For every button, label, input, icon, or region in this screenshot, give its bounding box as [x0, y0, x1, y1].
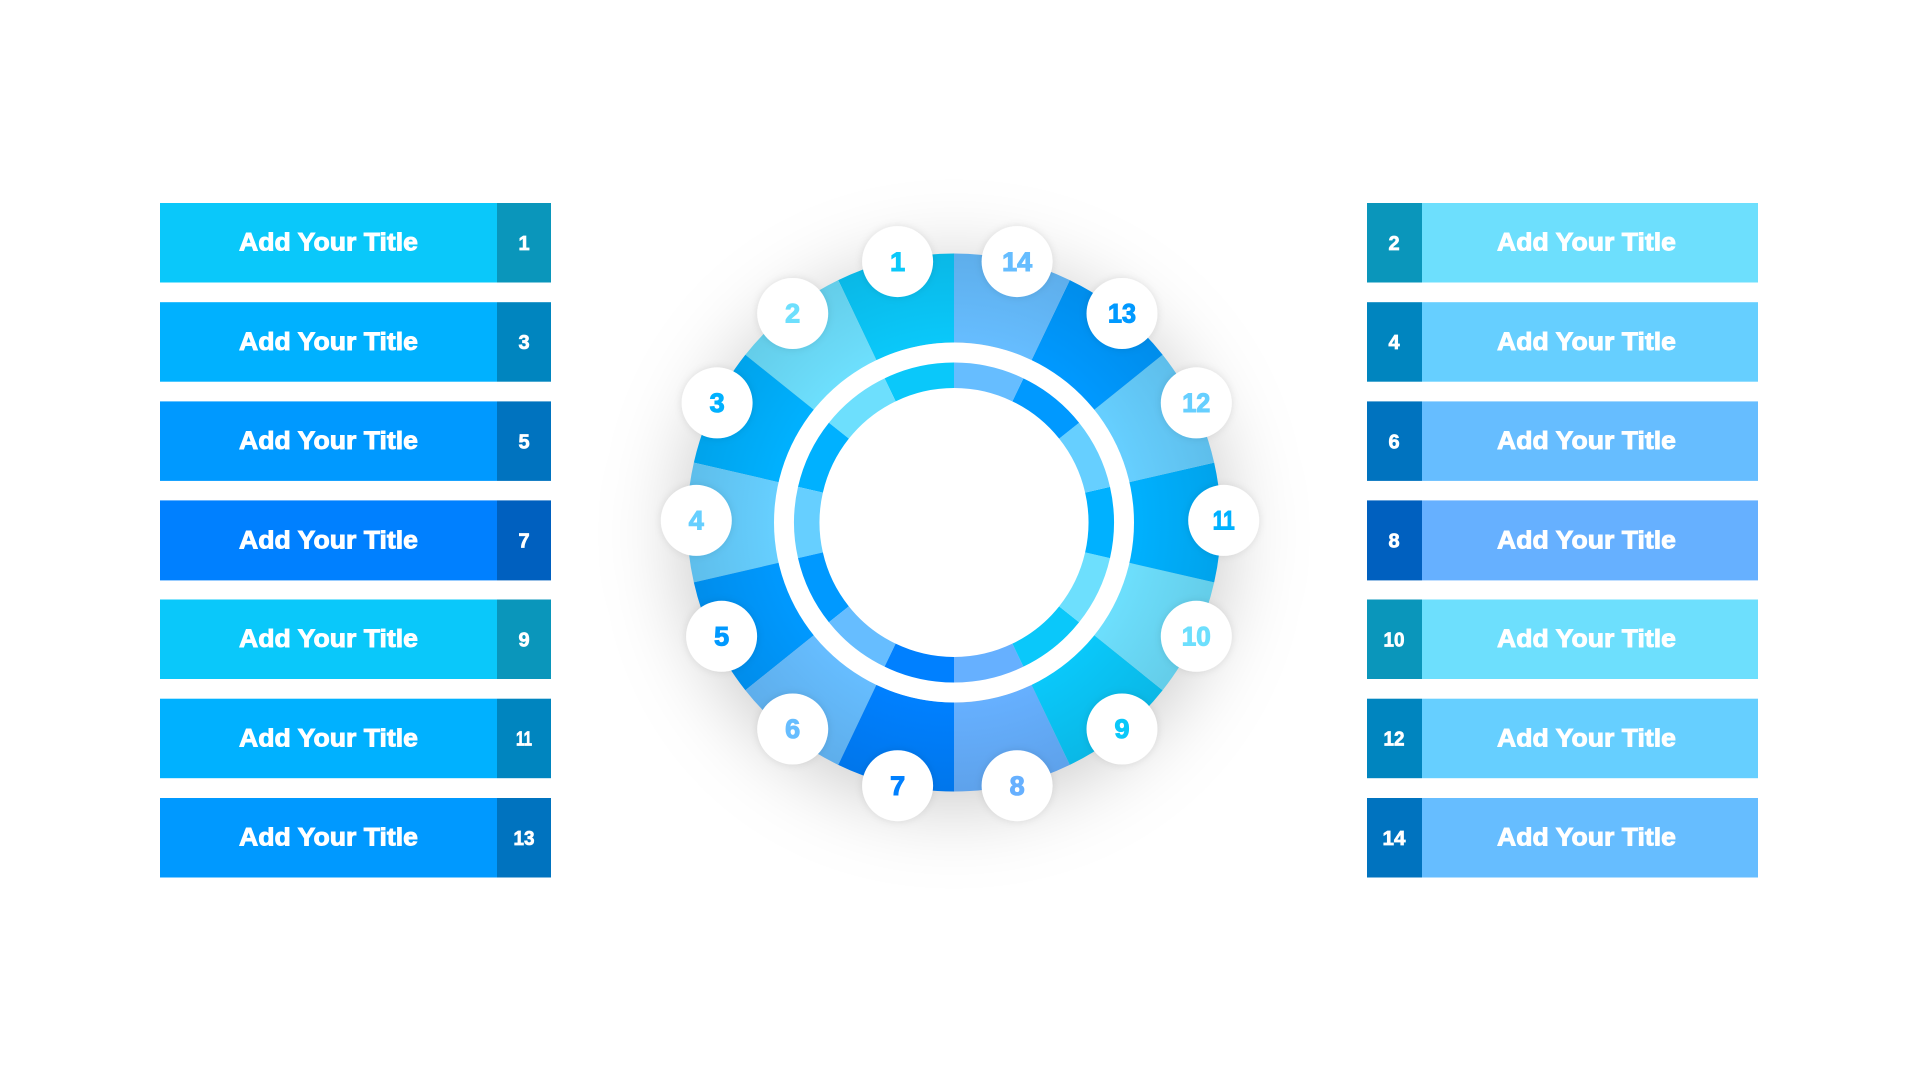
number badge 9	[1086, 694, 1158, 764]
bar 2: 2	[1388, 233, 1400, 255]
bar 9	[160, 600, 551, 679]
bar 12: Add Your Title	[1497, 724, 1676, 752]
number badge 8: 8	[1010, 771, 1025, 801]
number badge 5	[686, 601, 757, 672]
number badge 1	[862, 226, 933, 297]
number badge 14	[982, 226, 1053, 297]
number badge 9: 9	[1114, 714, 1130, 744]
bar 10	[1367, 600, 1758, 679]
bar 7	[160, 500, 551, 580]
number badge 6: 6	[785, 714, 800, 744]
number badge 14: 14	[1002, 247, 1032, 277]
bar 3: 3	[518, 332, 530, 354]
bar 7: Add Your Title	[239, 526, 418, 554]
number badge 10	[1161, 601, 1232, 672]
white hub	[774, 342, 1134, 702]
number badge 4	[661, 485, 732, 556]
bar 13: 13	[514, 828, 534, 850]
wheel sectors and inner ring	[687, 254, 1221, 792]
number badge 3	[682, 367, 753, 438]
bar 6: Add Your Title	[1497, 427, 1676, 455]
bar 14: Add Your Title	[1497, 824, 1676, 852]
bar 12: 12	[1384, 729, 1404, 751]
bar 1	[160, 203, 551, 282]
bar 9: 9	[518, 630, 530, 652]
number badge 7: 7	[890, 771, 905, 801]
number badge 7	[862, 750, 933, 821]
bar 10: 10	[1384, 630, 1404, 652]
bar 5: 5	[518, 431, 530, 453]
bar 2	[1367, 203, 1758, 282]
bar 4: Add Your Title	[1497, 328, 1676, 356]
bar 7: 7	[518, 531, 530, 553]
bar 1: Add Your Title	[239, 229, 418, 257]
bar 13: Add Your Title	[239, 824, 418, 852]
number badge 5: 5	[714, 622, 729, 652]
bar 4	[1367, 302, 1758, 382]
bar 12	[1367, 699, 1758, 778]
number badge 13	[1086, 278, 1158, 349]
bar 10: Add Your Title	[1497, 625, 1676, 653]
bar 11: Add Your Title	[239, 724, 418, 752]
number badge 2	[757, 278, 828, 349]
number badge 8	[982, 750, 1053, 821]
number badge 12	[1161, 367, 1232, 438]
bar 11: 11	[516, 729, 532, 751]
number badge 10: 10	[1182, 622, 1211, 652]
bar 1: 1	[518, 233, 530, 255]
inner ring of 14 segments	[794, 362, 1114, 682]
bar 2: Add Your Title	[1497, 229, 1676, 257]
bar 6	[1367, 401, 1758, 481]
number badge 4: 4	[689, 506, 704, 536]
outer ring of 14 sectors	[687, 254, 1221, 792]
panel: right title bars	[1367, 203, 1758, 878]
number badge 11: 11	[1213, 506, 1235, 536]
number badge 2: 2	[785, 299, 800, 329]
bar 8: Add Your Title	[1497, 526, 1676, 554]
bar 8	[1367, 500, 1758, 580]
number badge 12: 12	[1182, 388, 1210, 418]
bar 8: 8	[1388, 531, 1400, 553]
number badge 13: 13	[1108, 299, 1136, 329]
bar 6: 6	[1388, 431, 1400, 453]
wheel shadow	[686, 266, 1222, 802]
bar 5	[160, 401, 551, 481]
bar 3	[160, 302, 551, 382]
bar 3: Add Your Title	[239, 328, 418, 356]
bar 14	[1367, 798, 1758, 878]
bar 11	[160, 699, 551, 778]
number badge 11	[1188, 485, 1259, 556]
number badge 6	[757, 694, 828, 764]
bar 5: Add Your Title	[239, 427, 418, 455]
bar 13	[160, 798, 551, 878]
bar 4: 4	[1388, 332, 1400, 354]
bar 14: 14	[1382, 828, 1406, 850]
wheel diagram	[661, 226, 1259, 821]
number badge 1: 1	[890, 247, 905, 277]
panel: left title bars	[160, 203, 551, 878]
bar 9: Add Your Title	[239, 625, 418, 653]
number badge 3: 3	[710, 388, 725, 418]
